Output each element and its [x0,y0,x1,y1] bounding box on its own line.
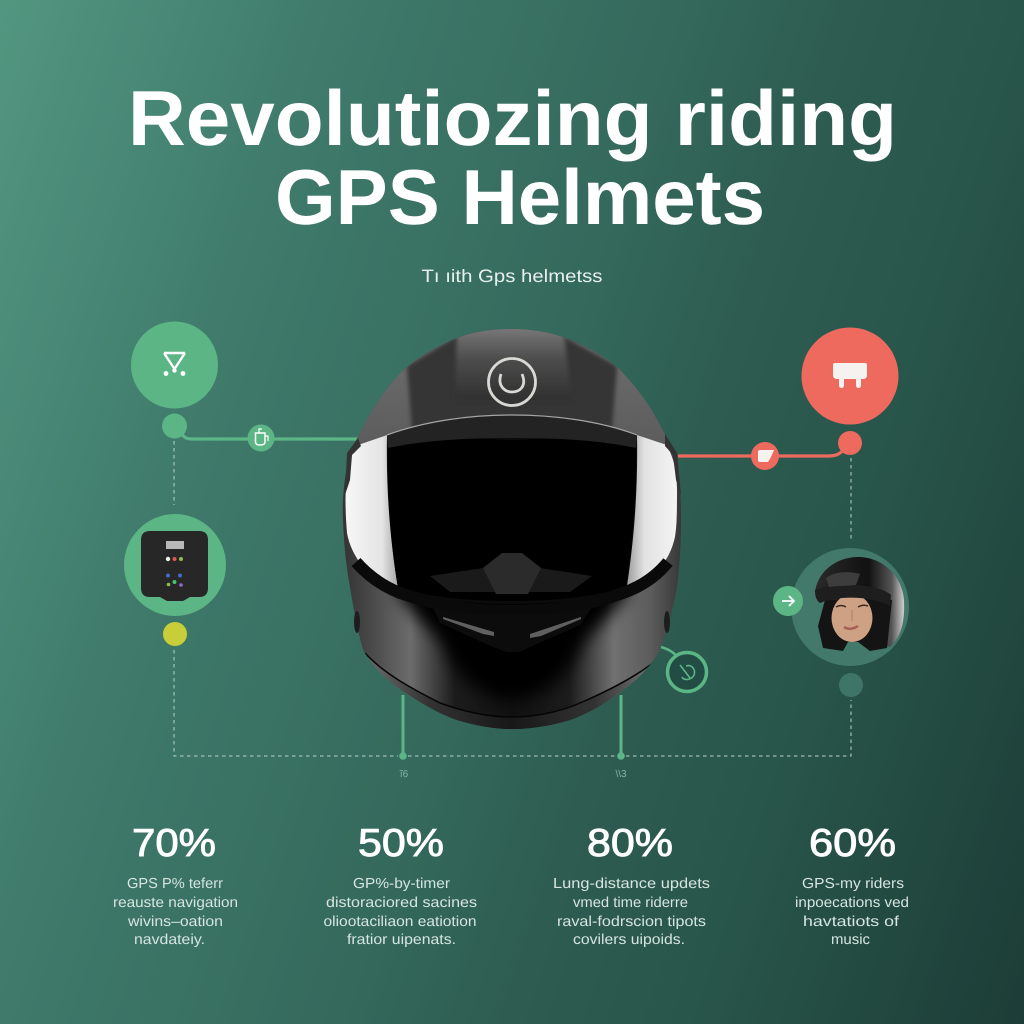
stat: 80%: Lung-distance updets [553,876,710,892]
stat: 60%: inpoecations ved [795,895,909,911]
portrait panel [791,548,909,666]
small axis marks: \\3 [615,769,627,780]
visor inner dark [388,435,636,601]
icon: red badge [751,442,779,470]
dark node dot [839,673,863,697]
small axis marks: ĩ6 [399,769,409,780]
chin vent piece [430,568,592,592]
title: Revolutiozing riding [128,74,897,162]
visor lower trim [356,562,668,611]
icon: red circle [802,328,898,424]
title: GPS Helmets [275,153,765,241]
stat: 50% [324,822,477,948]
helmet shell [340,325,685,735]
subtitle: Tı ıith Gps helmetss [422,266,602,286]
rider hair [818,600,892,651]
visor top band [387,415,637,448]
helmet on rider [815,557,904,647]
connectors: green vertical lines [399,695,625,760]
stat: 80%: 80% [587,822,673,865]
stat: 50%: distoraciored sacines [326,895,477,911]
stat: 70%: wivins–oation [127,914,223,930]
visor glass [346,415,677,604]
icon: navigation circle [131,322,218,408]
stat: 70%: navdateiy. [134,932,205,948]
stat: 60% [795,822,909,948]
stat: 60%: GPS-my riders [802,876,904,892]
yellow node dot [163,622,187,646]
stat: 70%: 70% [132,822,216,865]
emblem [488,358,536,406]
connector: green left line [181,432,358,439]
stat: 50%: fratior uipenats. [347,932,456,948]
side pivots [345,434,681,633]
stat: 80% [553,822,710,948]
stat: 70% [113,822,238,948]
rider face [832,594,872,642]
device panel [124,514,226,616]
helmet brim and vent [815,572,891,606]
stat: 50%: 50% [358,822,444,865]
upper shell side panels [356,329,665,444]
central helmet [340,325,685,735]
small axis marks [399,769,627,780]
left node dot [162,414,187,438]
title [128,74,897,241]
stat: 80%: raval-fodrscion tipots [557,914,706,930]
stat: 60%: music [831,932,870,948]
icon: cup badge [248,424,274,452]
stat: 60%: 60% [809,822,896,865]
icon: ring badge [661,647,706,692]
red node dot [838,431,862,455]
stat: 70%: reauste navigation [113,895,238,911]
black under visor [390,594,636,700]
visor right reflection [627,435,677,586]
stat: 50%: GP%-by-timer [353,876,450,892]
stat: 60%: havtatiots of [803,914,900,930]
stat: 50%: oliootaciliaon eatiotion [324,914,476,930]
top centre fade [454,329,568,383]
icon: arrow badge [773,586,803,616]
chin vent [433,607,592,652]
stat: 70%: GPS P% teferr [127,876,223,892]
lower rim [365,654,649,729]
visor left reflection [346,435,398,588]
dashed connector lines [174,441,851,756]
connector: red right line [678,449,845,456]
stat: 80%: vmed time riderre [573,895,688,911]
dark stripe [407,336,617,430]
stat: 80%: covilers uipoids. [573,932,685,948]
